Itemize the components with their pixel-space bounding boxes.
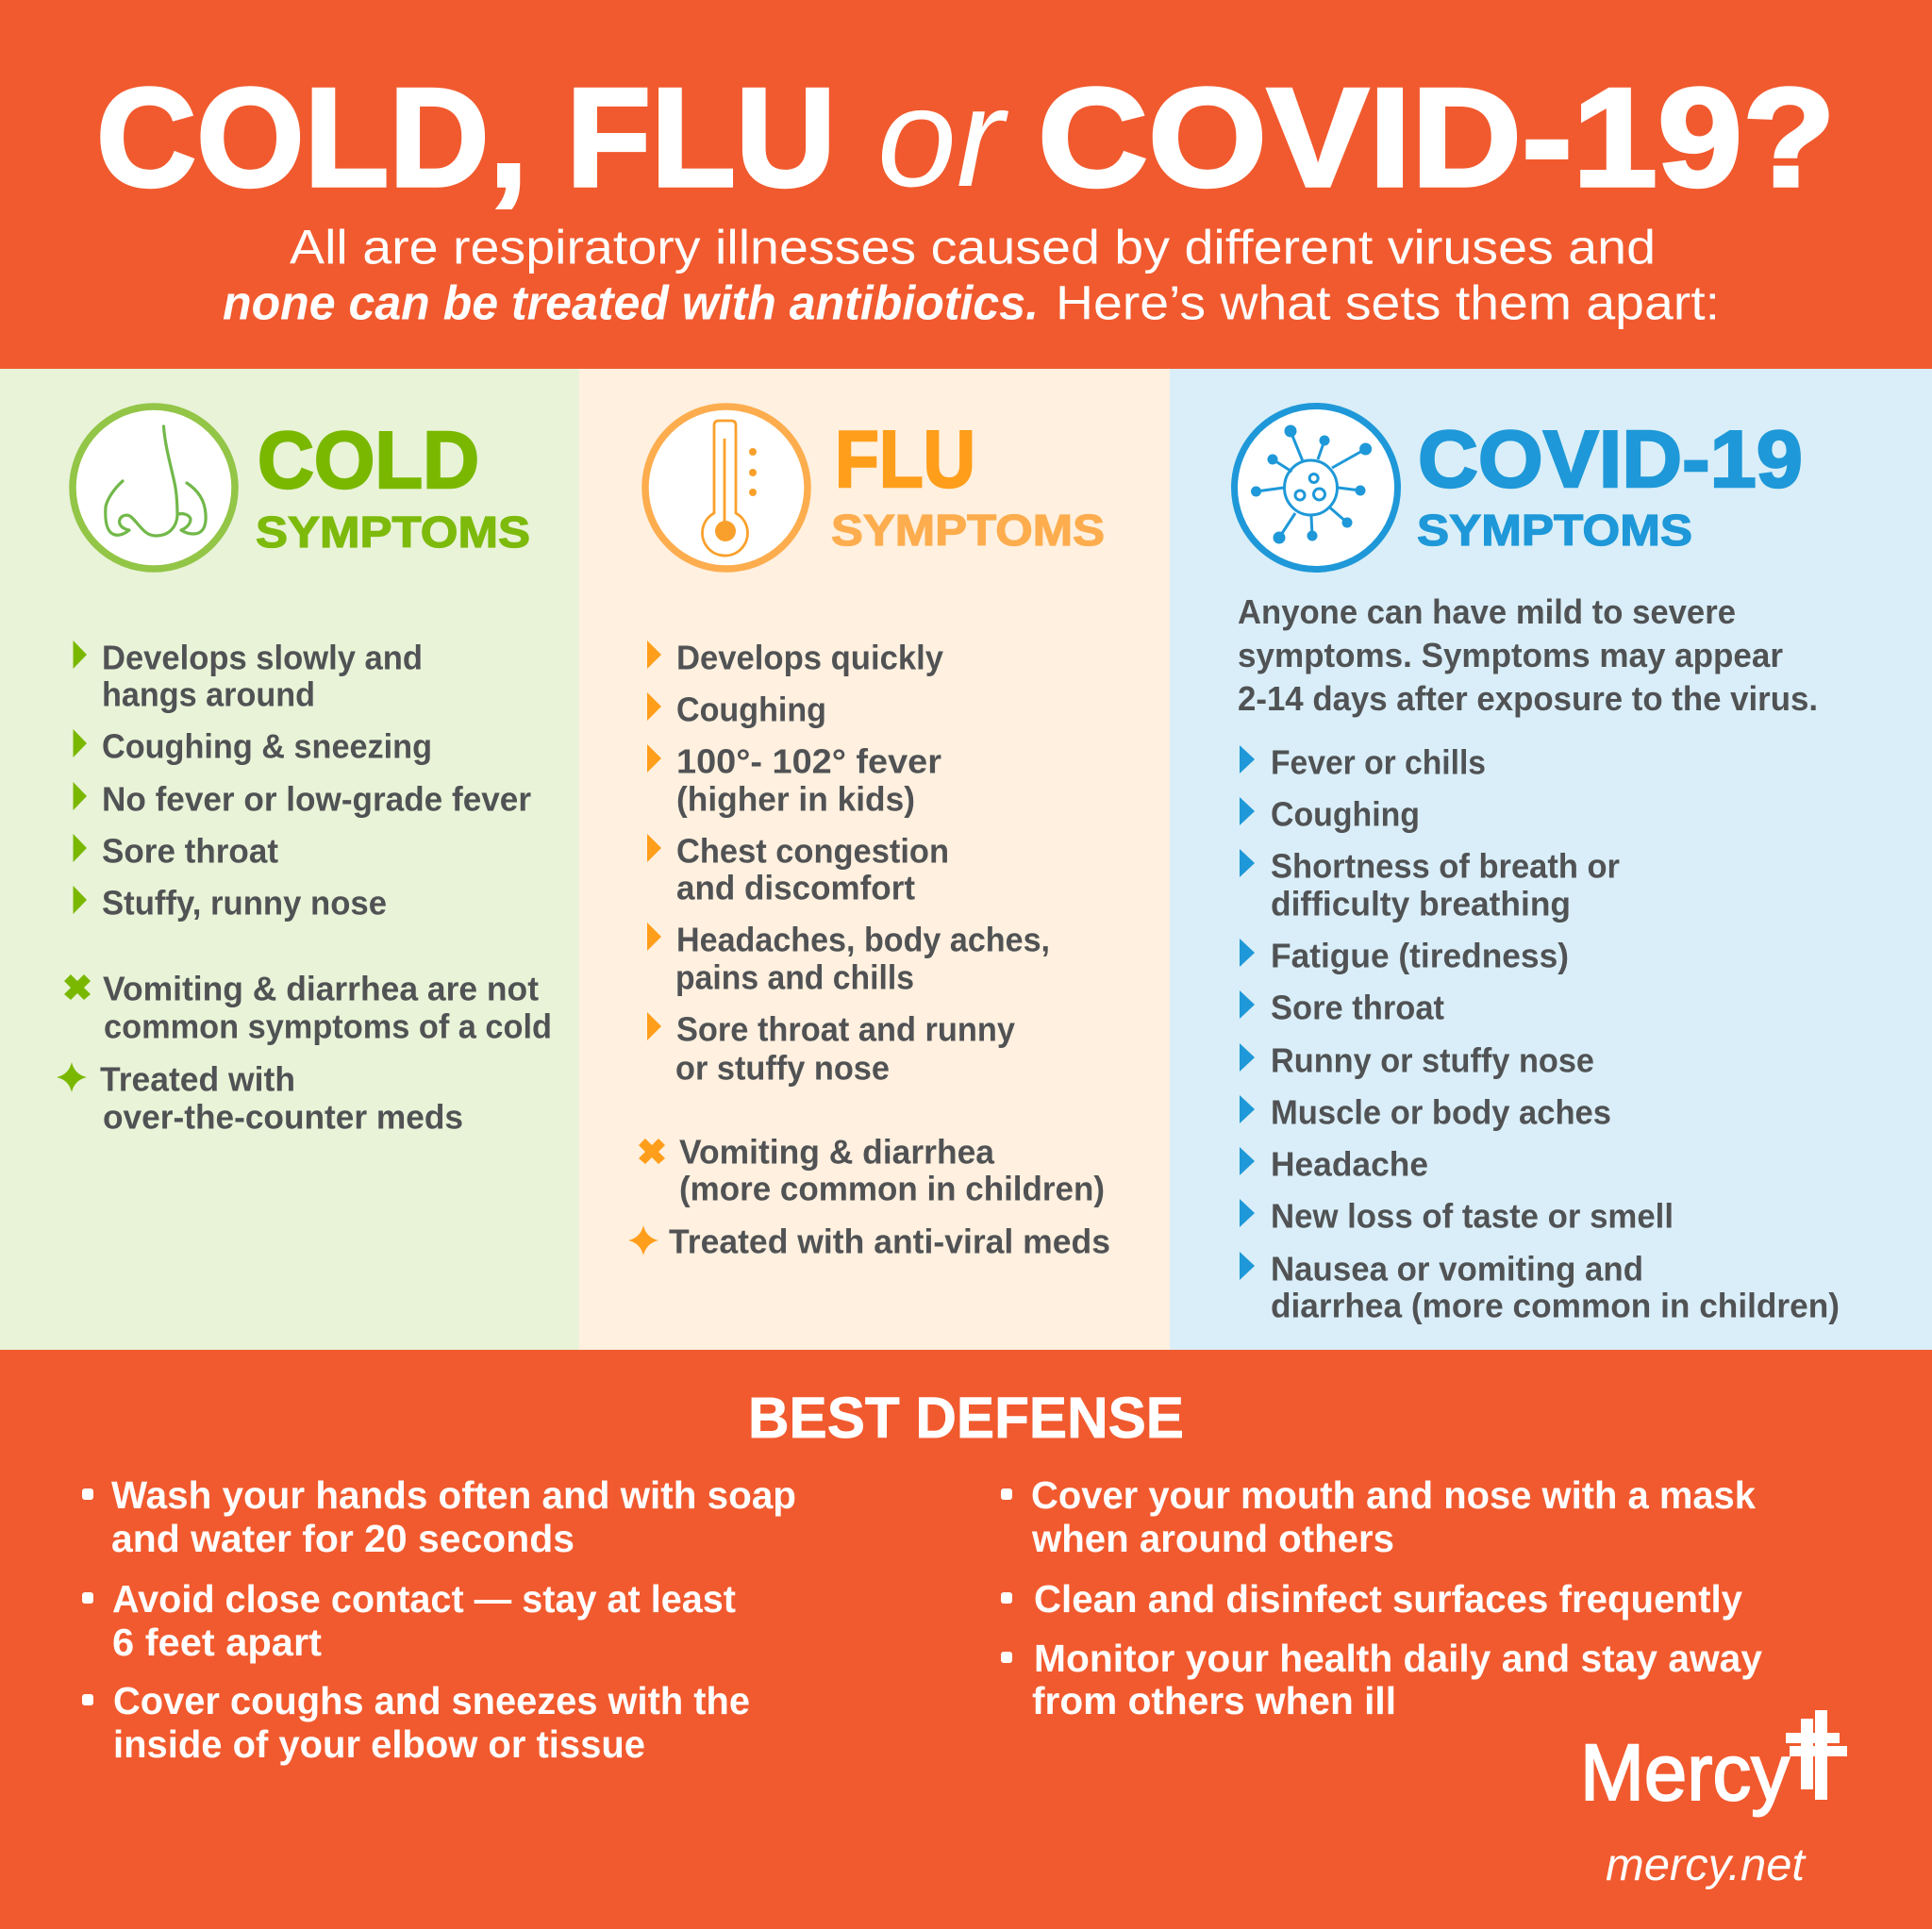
note: treatment: Treated with <box>100 1060 295 1098</box>
subtitle <box>223 221 1720 330</box>
note: vomiting and diarrhea: Vomiting & diarrhea <box>679 1132 995 1172</box>
panel: covid-19 <box>1170 369 1932 1350</box>
tip: wear a mask: Cover your mouth and nose with a mask <box>1031 1473 1756 1517</box>
list item: nausea <box>1240 1249 1840 1324</box>
panel: cold <box>0 369 579 1350</box>
list item: develops quickly: Develops quickly <box>676 638 943 677</box>
logo: mercy <box>1580 1710 1847 1817</box>
panel: flu <box>579 369 1170 1350</box>
tip: wear a mask <box>1001 1473 1756 1560</box>
list item: runny nose: Runny or stuffy nose <box>1271 1041 1594 1079</box>
heading: covid-19: COVID-19 <box>1418 415 1803 505</box>
list item: aches: Headaches, body aches, <box>676 921 1050 958</box>
heading: flu <box>831 415 1105 555</box>
list item: chest congestion: Chest congestion <box>676 832 949 870</box>
tip: avoid close contact: 6 feet apart <box>112 1621 322 1664</box>
list item: sore throat: Sore throat <box>1271 989 1444 1026</box>
note: treatment <box>57 1060 463 1136</box>
list item: sore throat: Sore throat <box>102 832 278 870</box>
title: COLD, FLU <box>96 58 836 216</box>
heading: cold: SYMPTOMS <box>256 507 530 557</box>
tip: cover coughs: inside of your elbow or tissue <box>113 1722 645 1766</box>
list item: chest congestion <box>647 832 949 907</box>
list item: fatigue: Fatigue (tiredness) <box>1271 936 1569 975</box>
list item: develops slowly <box>74 638 423 713</box>
heading: covid-19: SYMPTOMS <box>1417 506 1692 555</box>
list item: shortness of breath: Shortness of breath or <box>1271 847 1620 885</box>
list item: stuffy nose: Stuffy, runny nose <box>102 883 387 923</box>
list item: aches: Muscle or body aches <box>1271 1092 1611 1132</box>
tip: cover coughs: Cover coughs and sneezes with the <box>113 1679 750 1722</box>
heading: cold: COLD <box>258 416 479 506</box>
title: or <box>877 58 1008 216</box>
tip: avoid close contact: Avoid close contact — stay at least <box>112 1577 736 1621</box>
tip: avoid close contact <box>82 1577 736 1664</box>
list item: develops slowly: Develops slowly and <box>102 638 423 677</box>
tip: monitor health: from others when ill <box>1032 1679 1396 1722</box>
title: COVID-19? <box>1038 58 1836 216</box>
subtitle: All are respiratory illnesses caused by different viruses and <box>290 221 1656 274</box>
list item: fever: 100°- 102° fever <box>676 741 941 781</box>
tip: cover coughs <box>82 1679 750 1766</box>
intro text: Anyone can have mild to severe <box>1238 592 1736 631</box>
list item: fever: No fever or low-grade fever <box>102 779 531 819</box>
list item: headache: Headache <box>1271 1145 1428 1183</box>
title <box>96 58 1836 216</box>
list item: fever <box>647 741 941 819</box>
tip: wear a mask: when around others <box>1031 1517 1394 1560</box>
list item: coughing: Coughing <box>1271 794 1420 834</box>
list item: sore throat: or stuffy nose <box>675 1049 890 1087</box>
note: vomiting and diarrhea <box>64 970 552 1045</box>
tip: monitor health: Monitor your health daily and stay away <box>1034 1637 1762 1680</box>
tip: wash hands: and water for 20 seconds <box>111 1517 575 1560</box>
note: treatment: over-the-counter meds <box>103 1098 463 1136</box>
heading: covid-19 <box>1417 415 1803 555</box>
list item: nausea: diarrhea (more common in children) <box>1271 1287 1840 1324</box>
icon: thermometer <box>645 407 808 569</box>
list item: aches: pains and chills <box>675 958 914 996</box>
heading: best defense: BEST DEFENSE <box>748 1386 1184 1450</box>
list item: chest congestion: and discomfort <box>676 868 915 907</box>
list item: sore throat: Sore throat and runny <box>676 1009 1015 1049</box>
subtitle: none can be treated with antibiotics. <box>223 275 1039 330</box>
note: vomiting and diarrhea: Vomiting & diarrhea are not <box>103 970 539 1007</box>
logo: mercy: Mercy <box>1580 1728 1790 1817</box>
list item: shortness of breath <box>1240 847 1620 923</box>
icon: virus <box>1234 406 1398 570</box>
list item: aches <box>647 921 1050 996</box>
note: vomiting and diarrhea: common symptoms of a cold <box>104 1007 552 1045</box>
note: treatment: Treated with anti-viral meds <box>669 1222 1110 1260</box>
tip: clean surfaces: Clean and disinfect surfaces frequently <box>1034 1577 1742 1621</box>
list item: coughing: Coughing <box>676 690 826 728</box>
intro text: 2-14 days after exposure to the virus. <box>1238 679 1818 718</box>
list item: sore throat <box>647 1009 1015 1087</box>
tip: wash hands <box>82 1473 796 1560</box>
tip: monitor health <box>1001 1637 1762 1722</box>
list item: fever: (higher in kids) <box>676 779 915 819</box>
heading: cold <box>256 416 530 557</box>
note: vomiting and diarrhea <box>639 1132 1105 1207</box>
list item: fever: Fever or chills <box>1271 743 1486 781</box>
list item: develops slowly: hangs around <box>102 675 315 713</box>
heading: flu: FLU <box>835 415 975 505</box>
website url: mercy.net <box>1606 1840 1807 1890</box>
panel: best defense <box>82 1386 1847 1890</box>
intro text: symptoms. Symptoms may appear <box>1238 636 1783 674</box>
icon: nose <box>73 407 235 569</box>
note: vomiting and diarrhea: (more common in children) <box>679 1170 1105 1207</box>
list item: coughing and sneezing: Coughing & sneezing <box>102 726 432 766</box>
heading: flu: SYMPTOMS <box>831 506 1105 555</box>
list item: loss of taste: New loss of taste or smell <box>1271 1196 1674 1236</box>
tip: wash hands: Wash your hands often and with soap <box>111 1473 796 1517</box>
intro text <box>1238 592 1818 718</box>
list item: shortness of breath: difficulty breathing <box>1271 885 1571 923</box>
list item: nausea: Nausea or vomiting and <box>1271 1249 1643 1289</box>
subtitle: Here’s what sets them apart: <box>1056 275 1720 330</box>
